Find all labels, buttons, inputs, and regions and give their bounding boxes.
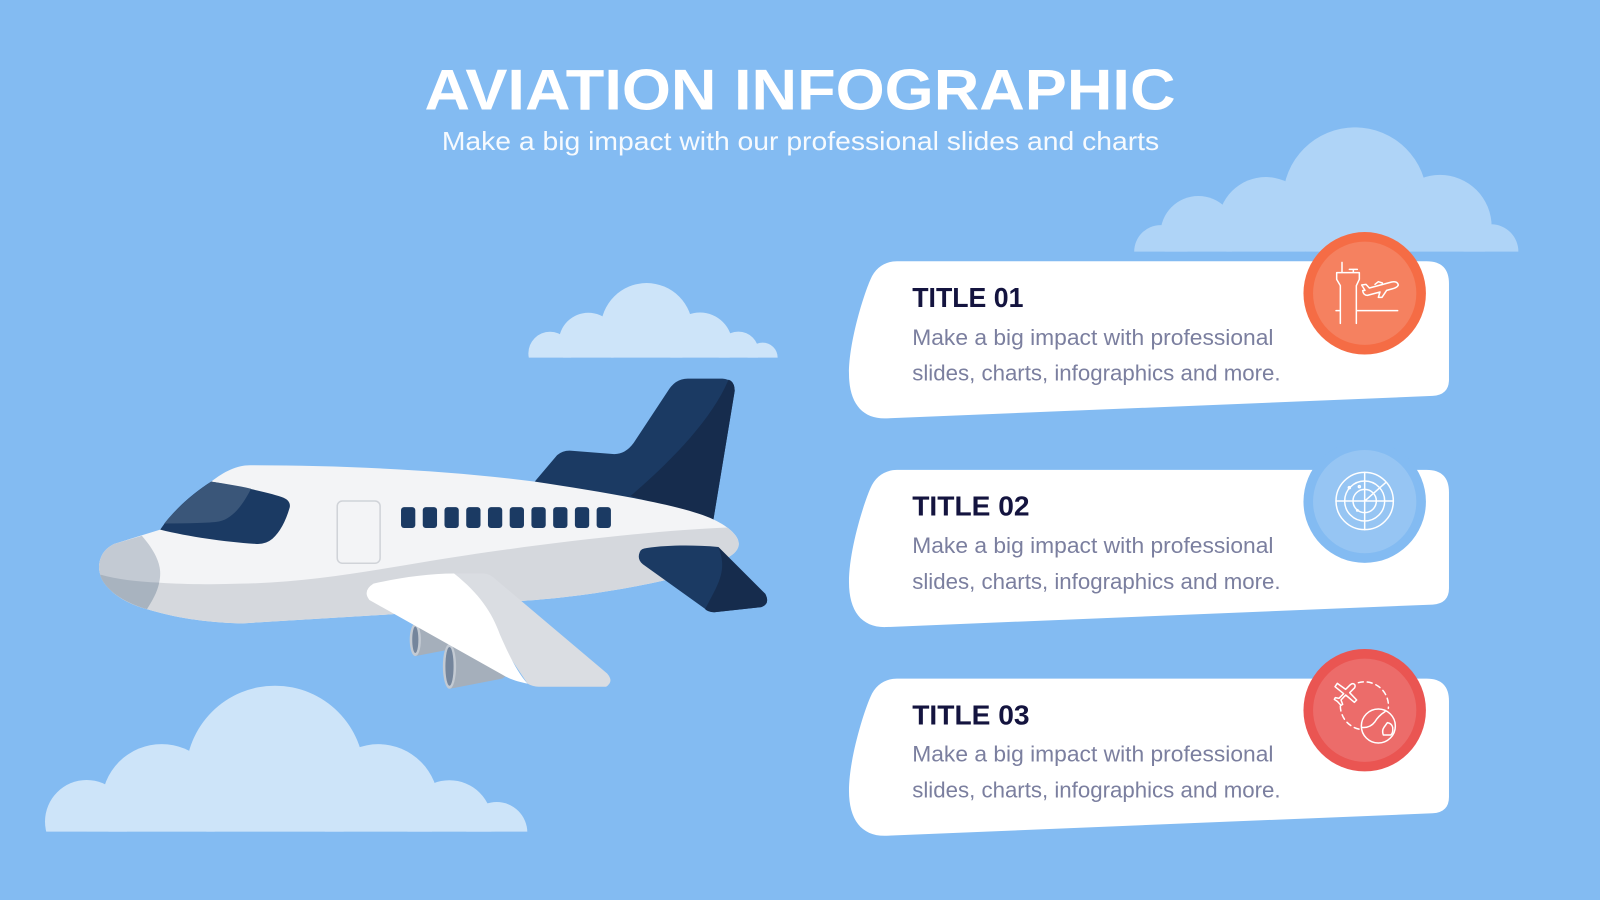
icon badge: plane and globe bbox=[1303, 649, 1426, 771]
cloud: top right bbox=[1134, 127, 1518, 252]
infographic canvas bbox=[45, 69, 1518, 836]
icon badge: radar bbox=[1303, 440, 1426, 563]
card 03 text line 2: slides, charts, infographics and more. bbox=[912, 777, 1281, 802]
card 01 background bbox=[849, 261, 1449, 418]
cockpit window bbox=[160, 482, 290, 544]
airplane bbox=[99, 379, 767, 689]
card 02 text line 2: slides, charts, infographics and more. bbox=[912, 569, 1281, 594]
fuselage bbox=[99, 465, 739, 623]
subtitle: Make a big impact with our professional slides and charts bbox=[442, 128, 1159, 156]
tail fin bbox=[535, 379, 735, 520]
rear engine bbox=[410, 623, 459, 656]
card 03 background bbox=[849, 679, 1449, 836]
card 03 bbox=[849, 649, 1449, 836]
door bbox=[337, 501, 380, 563]
card 01 heading: TITLE 01 bbox=[912, 282, 1023, 313]
card 03 text: Make a big impact with professional bbox=[912, 742, 1273, 767]
title: AVIATION INFOGRAPHIC bbox=[424, 59, 1176, 123]
cloud: bottom left bbox=[45, 686, 528, 832]
card 03 heading: TITLE 03 bbox=[912, 699, 1030, 730]
card 02 background bbox=[849, 470, 1449, 627]
wing bbox=[367, 573, 610, 687]
front engine bbox=[443, 643, 510, 689]
card 02 heading: TITLE 02 bbox=[912, 490, 1030, 521]
cloud: middle bbox=[528, 283, 778, 358]
icon badge: control tower and plane bbox=[1303, 232, 1426, 354]
card 01 text: Make a big impact with professional bbox=[912, 325, 1273, 350]
card 01 text line 2: slides, charts, infographics and more. bbox=[912, 361, 1281, 386]
passenger windows bbox=[401, 507, 611, 528]
tail stabilizer bbox=[639, 546, 767, 612]
card 02 bbox=[849, 440, 1449, 627]
card 01 bbox=[849, 232, 1449, 418]
card 02 text: Make a big impact with professional bbox=[912, 533, 1273, 558]
